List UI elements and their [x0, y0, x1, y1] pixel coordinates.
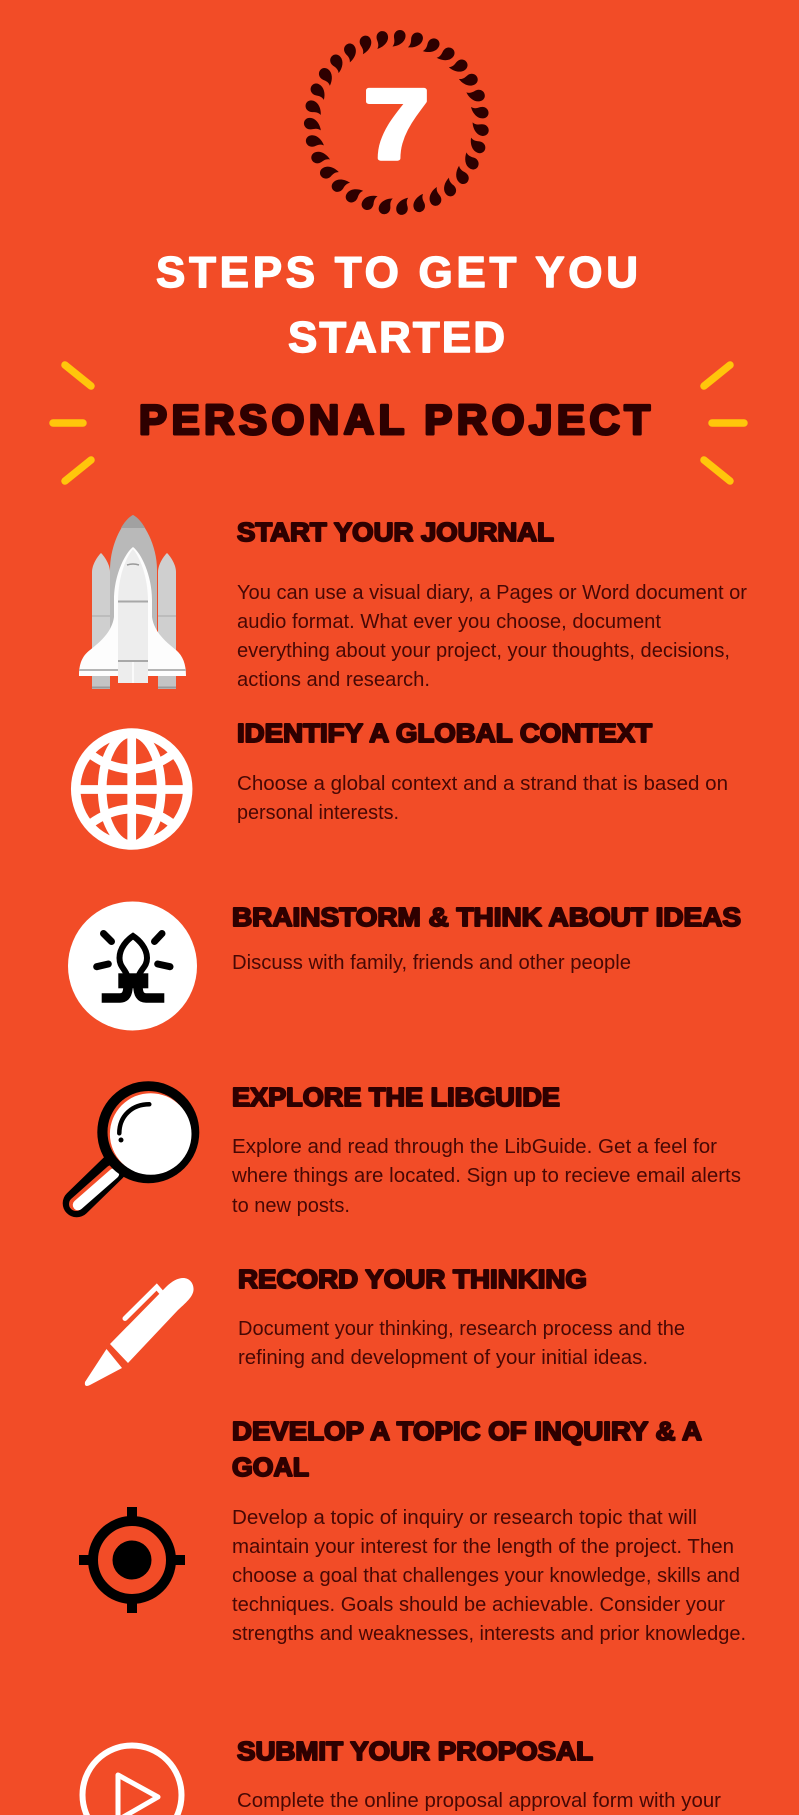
heading: SUBMIT YOUR PROPOSAL: [237, 1738, 593, 1766]
body text: Develop a topic of inquiry or research topic that will: [232, 1507, 697, 1529]
icon: play button: [82, 1746, 182, 1815]
body text: Document your thinking, research process and the: [238, 1318, 685, 1340]
body text: [232, 1507, 746, 1645]
body text: techniques. Goals should be achievable. Consider your: [232, 1594, 725, 1616]
body text: [231, 1136, 741, 1217]
body text: everything about your project, your thoughts, decisions,: [237, 640, 730, 662]
body text: [237, 582, 747, 691]
step 4: explore the libguide: [76, 1081, 741, 1217]
step 5: record your thinking: [85, 1266, 685, 1386]
step 2: identify a global context: [76, 720, 728, 845]
heading: RECORD YOUR THINKING: [238, 1266, 587, 1294]
body text: where things are located. Sign up to recieve email alerts: [231, 1165, 741, 1187]
yellow accent rays: [53, 365, 744, 481]
step 3: brainstorm: [68, 902, 741, 1030]
step 1: start your journal: [79, 515, 747, 691]
body text: [237, 773, 728, 824]
body text: choose a goal that challenges your knowledge, skills and: [232, 1565, 740, 1587]
body text: strengths and weaknesses, interests and prior knowledge.: [232, 1623, 746, 1645]
heading: BRAINSTORM & THINK ABOUT IDEAS: [232, 904, 741, 932]
heading: START YOUR JOURNAL: [237, 519, 554, 547]
icon: light bulb: [68, 902, 197, 1030]
icon: space shuttle: [79, 515, 186, 689]
heading: IDENTIFY A GLOBAL CONTEXT: [237, 720, 652, 748]
body text: You can use a visual diary, a Pages or Word document or: [237, 582, 747, 604]
body text: Discuss with family, friends and other people: [232, 952, 631, 974]
body text: audio format. What ever you choose, document: [237, 611, 661, 633]
step 7: submit your proposal: [82, 1738, 721, 1815]
title: steps to get you started: STEPS TO GET YOU: [156, 248, 638, 297]
heading: GOAL: [232, 1454, 309, 1482]
title: steps to get you started: [156, 248, 638, 362]
badge: ring with number 7: 7: [364, 69, 429, 179]
body text: to new posts.: [232, 1195, 350, 1217]
body text: [238, 1318, 685, 1369]
badge: ring with number 7: [304, 30, 489, 215]
heading: [232, 1418, 702, 1482]
body text: Explore and read through the LibGuide. Get a feel for: [232, 1136, 717, 1158]
body text: personal interests.: [237, 802, 399, 824]
body text: Choose a global context and a strand that is based on: [237, 773, 728, 795]
icon: globe: [76, 733, 188, 845]
heading: DEVELOP A TOPIC OF INQUIRY & A: [232, 1418, 702, 1446]
body text: refining and development of your initial ideas.: [238, 1347, 648, 1369]
icon: pen: [85, 1278, 194, 1386]
icon: magnifying glass: [76, 1081, 199, 1205]
icon: target: [79, 1507, 185, 1613]
body text: Complete the online proposal approval form with your: [237, 1790, 721, 1812]
title: steps to get you started: STARTED: [288, 313, 505, 362]
body text: maintain your interest for the length of the project. Then: [232, 1536, 734, 1558]
subtitle: personal project: PERSONAL PROJECT: [139, 396, 650, 443]
heading: EXPLORE THE LIBGUIDE: [232, 1084, 560, 1112]
step 6: develop a topic of inquiry and a goal: [79, 1418, 746, 1645]
body text: actions and research.: [237, 669, 430, 691]
